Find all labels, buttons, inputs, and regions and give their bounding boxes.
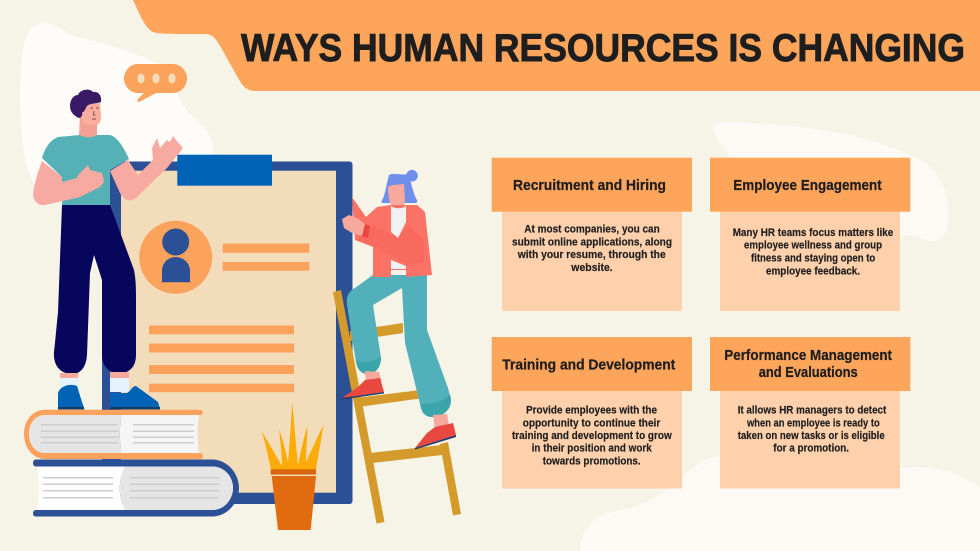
plant leaves <box>262 402 323 470</box>
panel: Performance Management and Evaluations <box>710 337 910 488</box>
man pants <box>54 205 136 374</box>
man shoe soles <box>58 407 160 410</box>
card text <box>512 224 672 274</box>
clipboard board <box>102 162 352 504</box>
resume name lines <box>223 244 309 271</box>
woman climbing ladder <box>342 170 456 450</box>
card body <box>720 211 900 311</box>
card text: employee wellness and group <box>744 240 882 252</box>
top book <box>24 410 203 459</box>
card heading: Performance Management <box>724 347 892 364</box>
woman ankles <box>365 371 449 430</box>
icon: profile photo <box>139 221 212 294</box>
man standing <box>33 90 183 409</box>
card text <box>512 405 672 468</box>
man right arm <box>110 136 183 200</box>
woman shirt bottom <box>391 260 406 269</box>
man neck <box>79 115 97 138</box>
card heading: Employee Engagement <box>733 177 882 194</box>
resume body lines <box>149 326 294 392</box>
man shoes <box>58 385 160 409</box>
woman hand <box>342 215 365 236</box>
resume paper <box>121 171 336 493</box>
stacked books <box>24 410 239 516</box>
card text: with your resume, through the <box>517 249 666 261</box>
card text: towards promotions. <box>543 456 641 468</box>
panel: Employee Engagement <box>710 158 910 311</box>
card text <box>733 227 893 277</box>
card text <box>738 405 887 455</box>
card body <box>502 211 682 311</box>
card heading <box>724 347 892 381</box>
card text: It allows HR managers to detect <box>738 405 887 417</box>
card body <box>502 390 682 488</box>
card text: employee feedback. <box>766 265 860 277</box>
card text: training and development to grow <box>512 430 672 442</box>
woman hair <box>381 174 417 203</box>
background blob: bottom right <box>580 456 980 551</box>
woman pants <box>347 275 451 417</box>
woman face <box>388 184 405 214</box>
man shirt <box>42 135 129 205</box>
woman hair bun <box>406 170 418 182</box>
card heading: and Evaluations <box>759 364 858 381</box>
ladder <box>333 290 461 524</box>
woman arm sleeve <box>358 225 424 265</box>
woman sleeve cuff <box>360 224 370 238</box>
card header <box>492 337 692 391</box>
background blob: upper left <box>20 23 214 215</box>
woman shoe soles <box>342 392 456 450</box>
plant in pot <box>262 402 323 530</box>
man face <box>80 103 101 125</box>
card text: Provide employees with the <box>526 405 657 417</box>
plant pot <box>272 476 316 530</box>
header banner <box>133 0 980 91</box>
bottom book <box>33 460 239 516</box>
man face details <box>90 108 99 119</box>
man hair <box>70 90 101 118</box>
woman shoes <box>342 378 456 448</box>
plant pot rim <box>271 469 316 475</box>
card header <box>710 337 910 391</box>
card text: opportunity to continue their <box>523 418 661 430</box>
woman shirt top <box>391 206 406 238</box>
woman jacket <box>352 197 432 277</box>
clipboard clip <box>177 155 272 186</box>
card header <box>710 158 910 212</box>
card text: taken on new tasks or is eligible <box>738 430 885 442</box>
card body <box>720 390 900 488</box>
card text: for a promotion. <box>773 443 849 455</box>
card heading: Training and Development <box>502 356 675 373</box>
woman pant cuffs <box>356 356 451 417</box>
icon: speech bubble <box>124 64 187 102</box>
man ankles <box>60 372 129 378</box>
man left arm <box>33 161 104 205</box>
card heading: Recruitment and Hiring <box>513 177 666 194</box>
card text: fitness and staying open to <box>751 253 876 265</box>
panel: Training and Development <box>492 337 692 488</box>
card text: submit online applications, along <box>512 236 672 248</box>
card text: Many HR teams focus matters like <box>733 227 893 239</box>
card text: in their position and work <box>532 443 652 455</box>
background blob: right <box>713 122 948 270</box>
clipboard with resume <box>102 155 352 504</box>
card text: website. <box>570 262 613 274</box>
card text: At most companies, you can <box>524 224 660 236</box>
panel: Recruitment and Hiring <box>492 158 692 311</box>
card text: when an employee is ready to <box>746 418 880 430</box>
man socks <box>60 372 129 392</box>
card header <box>492 158 692 212</box>
